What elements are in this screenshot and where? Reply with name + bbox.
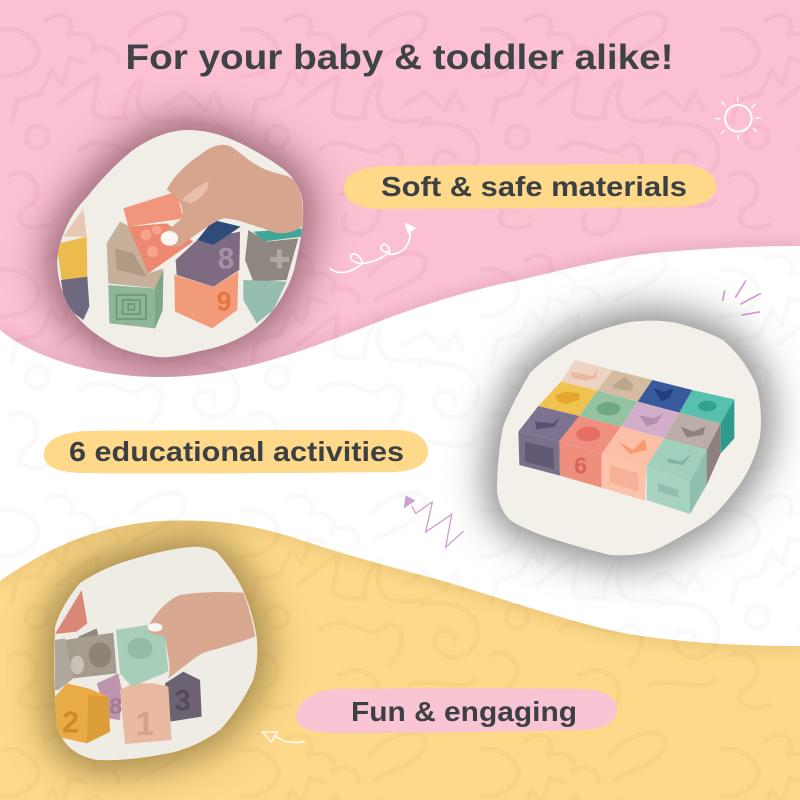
raised shapes — [535, 369, 717, 465]
back salmon block — [55, 590, 87, 634]
callout: 6 educational activities: 6 educational activities — [69, 436, 404, 467]
front faces: 6 — [574, 452, 587, 478]
callout: soft and safe materials — [344, 164, 716, 209]
mint block — [116, 625, 168, 687]
icon: sun — [716, 97, 761, 139]
purple and orange stack: 9 — [217, 287, 231, 317]
photo panel: arranged blocks — [497, 321, 761, 555]
panel: pink top wave — [0, 0, 800, 377]
right stack of blocks — [243, 228, 302, 323]
hand — [147, 592, 255, 678]
peach block 1: 1 — [136, 706, 154, 743]
purple block 3 — [165, 672, 202, 722]
front faces — [518, 399, 734, 514]
title: For your baby & toddler alike! — [126, 38, 674, 77]
icon: pink burst lines — [723, 281, 760, 315]
grey blocks row — [55, 628, 117, 690]
yellow block 2 — [55, 683, 110, 743]
beige and green stack — [107, 222, 163, 328]
photo panel: hand squeezing block — [57, 130, 303, 357]
callout: fun and engaging: Fun & engaging — [351, 696, 577, 727]
purple block 3: 3 — [175, 685, 191, 718]
left stack of blocks — [57, 208, 89, 320]
photo panel: hand picking block — [54, 547, 257, 760]
hand — [161, 145, 303, 247]
purple and orange stack: 8 — [218, 242, 234, 275]
panel: yellow bottom wave — [0, 520, 800, 800]
callout: fun and engaging — [296, 688, 617, 733]
lilac block 8 — [97, 673, 122, 720]
icon: white loop arrow — [330, 222, 416, 273]
purple and orange stack — [174, 220, 241, 328]
peach block 1 — [120, 683, 172, 744]
lilac block 8: 8 — [109, 693, 122, 719]
yellow block 2: 2 — [62, 706, 79, 740]
salmon squeezed block — [123, 192, 193, 273]
callout: 6 educational activities — [44, 430, 428, 473]
block tops — [518, 360, 734, 482]
icon: zigzag arrow — [404, 495, 464, 547]
icon: small white arrow — [262, 732, 304, 743]
callout: soft and safe materials: Soft & safe materials — [381, 171, 687, 202]
